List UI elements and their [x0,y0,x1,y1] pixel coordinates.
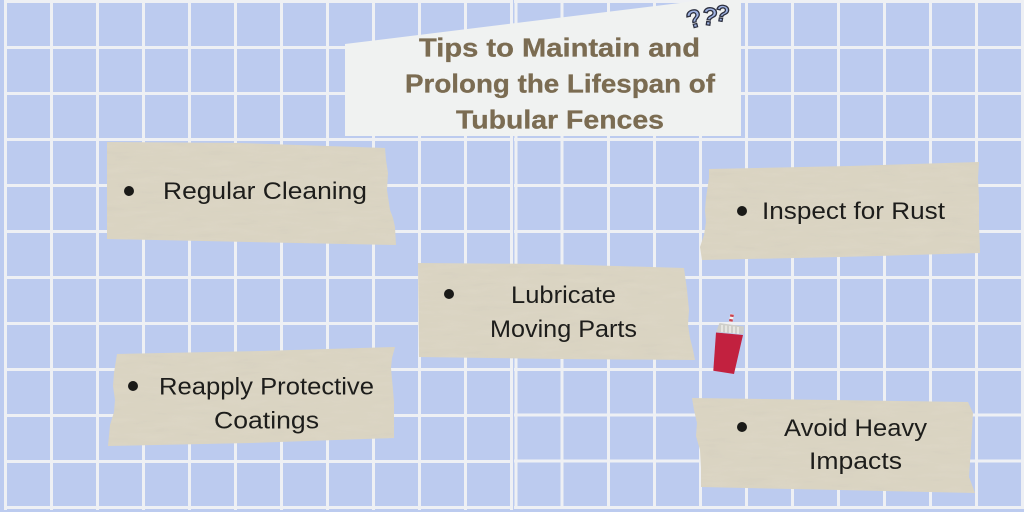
note: Regular Cleaning: Regular Cleaning [163,178,367,205]
icon: question marks [683,0,731,35]
note: Inspect for Rust [700,162,980,260]
icon: red cup [713,314,744,374]
note: Reapply Protective Coatings [108,347,395,446]
title panel [345,0,741,136]
title [405,32,715,134]
title: Prolong the Lifespan of [405,68,715,98]
note: Lubricate Moving Parts: Moving Parts [490,316,637,343]
note: Avoid Heavy Impacts [692,398,975,493]
note: Inspect for Rust: Inspect for Rust [762,198,945,225]
icon: question marks: ? [713,0,731,27]
note: Regular Cleaning [107,142,396,245]
note: Reapply Protective Coatings: Reapply Protective [159,374,374,400]
icon: question marks: ? [700,2,719,32]
note: Lubricate Moving Parts: Lubricate [511,282,616,309]
title: Tips to Maintain and [419,32,700,62]
note: Lubricate Moving Parts [418,263,695,360]
icon: question marks: ? [683,4,705,35]
note: Avoid Heavy Impacts: Avoid Heavy [784,415,928,442]
title: Tubular Fences [456,104,664,134]
note: Reapply Protective Coatings: Coatings [214,408,319,434]
note: Avoid Heavy Impacts: Impacts [809,448,902,475]
